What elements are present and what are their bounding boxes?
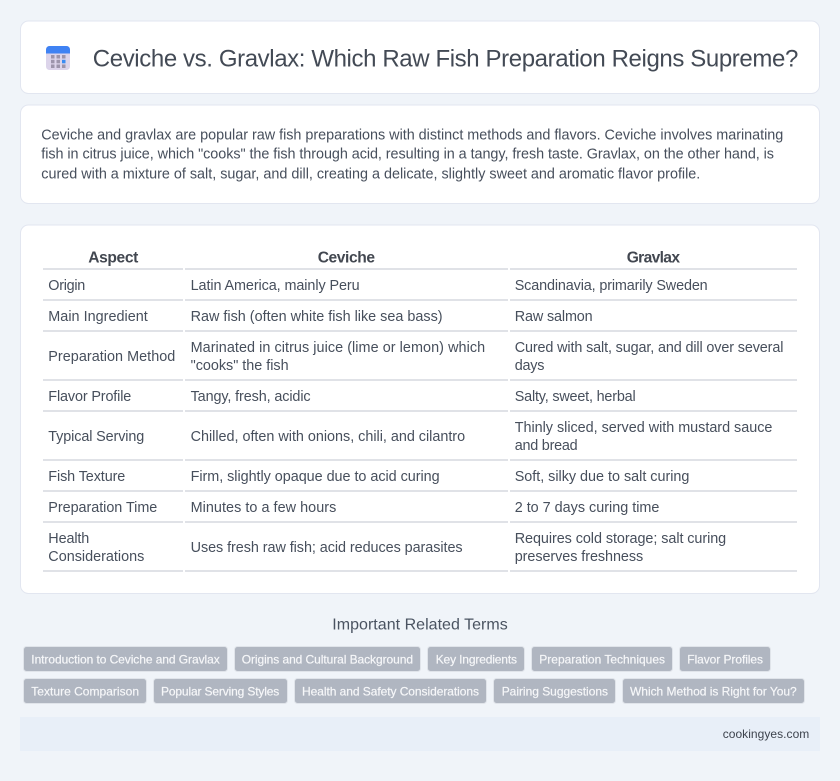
row: health considerations: Considerations bbox=[48, 549, 144, 565]
row: health considerations: Uses fresh raw fish; acid reduces parasites bbox=[191, 540, 463, 556]
row: fish texture: Fish Texture bbox=[48, 469, 125, 485]
title: Ceviche vs. Gravlax: Which Raw Fish Preparation Reigns Supreme? bbox=[93, 46, 798, 73]
row: origin bbox=[48, 278, 708, 294]
row: typical serving bbox=[48, 420, 772, 454]
tag: Which Method is Right for You? bbox=[630, 684, 797, 698]
row: typical serving: and bread bbox=[515, 438, 578, 454]
tag: Origins and Cultural Background bbox=[242, 652, 413, 666]
tag bbox=[494, 678, 616, 704]
tag: Popular Serving Styles bbox=[161, 684, 279, 698]
tag: Key Ingredients bbox=[436, 652, 517, 666]
row: fish texture bbox=[48, 469, 689, 485]
tag: Health and Safety Considerations bbox=[302, 684, 479, 698]
row: fish texture: Soft, silky due to salt curing bbox=[515, 469, 689, 485]
row: origin: Origin bbox=[48, 278, 85, 294]
row: health considerations: Requires cold storage; salt curing bbox=[515, 531, 726, 547]
row: flavor profile bbox=[48, 389, 636, 405]
table header row: Aspect bbox=[88, 250, 138, 267]
tag bbox=[532, 646, 672, 672]
row: main ingredient: Raw fish (often white fish like sea bass) bbox=[191, 309, 443, 325]
row: preparation method: Marinated in citrus juice (lime or lemon) which bbox=[191, 340, 485, 356]
intro text: Ceviche and gravlax are popular raw fish preparations with distinct methods and flavors. Ceviche involves marinating bbox=[41, 127, 783, 143]
row: flavor profile: Salty, sweet, herbal bbox=[515, 389, 636, 405]
row: fish texture: Firm, slightly opaque due to acid curing bbox=[191, 469, 440, 485]
row: preparation method: Preparation Method bbox=[48, 349, 175, 365]
tag bbox=[234, 646, 420, 672]
row: origin: Scandinavia, primarily Sweden bbox=[515, 278, 708, 294]
row: preparation time bbox=[48, 500, 659, 516]
footer bar bbox=[20, 717, 820, 751]
tag: Introduction to Ceviche and Gravlax bbox=[31, 652, 220, 666]
table header row: Ceviche bbox=[318, 250, 375, 267]
row: preparation method bbox=[48, 340, 783, 374]
tag: Texture Comparison bbox=[31, 684, 139, 698]
intro text: fish in citrus juice, which "cooks" the fish through acid, resulting in a tangy, fresh taste. Gravlax, on the other hand, is bbox=[41, 146, 774, 162]
row: typical serving: Typical Serving bbox=[48, 429, 144, 445]
tag: Preparation Techniques bbox=[539, 652, 665, 666]
tag bbox=[622, 678, 804, 704]
tag: Flavor Profiles bbox=[687, 652, 763, 666]
row: preparation method: Cured with salt, sugar, and dill over several bbox=[515, 340, 783, 356]
row: preparation time: 2 to 7 days curing time bbox=[515, 500, 659, 516]
row: preparation time: Minutes to a few hours bbox=[191, 500, 336, 516]
tag bbox=[24, 646, 228, 672]
row: health considerations: preserves freshness bbox=[515, 549, 643, 565]
intro text: cured with a mixture of salt, sugar, and dill, creating a delicate, slightly sweet and aromatic flavor profile. bbox=[41, 166, 700, 182]
heading: important related terms: Important Related Terms bbox=[332, 616, 508, 633]
row: flavor profile: Flavor Profile bbox=[48, 389, 131, 405]
panel: header card bbox=[20, 21, 820, 94]
tag bbox=[680, 646, 770, 672]
tag bbox=[154, 678, 288, 704]
row: preparation method: "cooks" the fish bbox=[191, 358, 289, 374]
table header row: Gravlax bbox=[627, 250, 680, 267]
tag bbox=[294, 678, 486, 704]
tag: Pairing Suggestions bbox=[502, 684, 608, 698]
tag list bbox=[24, 646, 804, 704]
row: main ingredient: Raw salmon bbox=[515, 309, 593, 325]
panel: comparison table bbox=[20, 225, 820, 594]
table header row bbox=[88, 250, 680, 267]
table grid lines bbox=[43, 268, 797, 572]
row: preparation time: Preparation Time bbox=[48, 500, 157, 516]
tag bbox=[24, 678, 146, 704]
panel: intro paragraph bbox=[20, 105, 820, 204]
row: preparation method: days bbox=[515, 358, 544, 374]
row: typical serving: Chilled, often with onions, chili, and cilantro bbox=[191, 429, 465, 445]
row: main ingredient: Main Ingredient bbox=[48, 309, 148, 325]
row: health considerations bbox=[48, 531, 726, 565]
intro text bbox=[41, 127, 783, 182]
row: flavor profile: Tangy, fresh, acidic bbox=[191, 389, 311, 405]
row: health considerations: Health bbox=[48, 531, 89, 547]
icon: calendar grid bbox=[46, 46, 70, 70]
row: origin: Latin America, mainly Peru bbox=[191, 278, 360, 294]
row: typical serving: Thinly sliced, served with mustard sauce bbox=[515, 420, 772, 436]
tag bbox=[428, 646, 524, 672]
row: main ingredient bbox=[48, 309, 593, 325]
footer source text: cookingyes.com bbox=[723, 727, 809, 741]
